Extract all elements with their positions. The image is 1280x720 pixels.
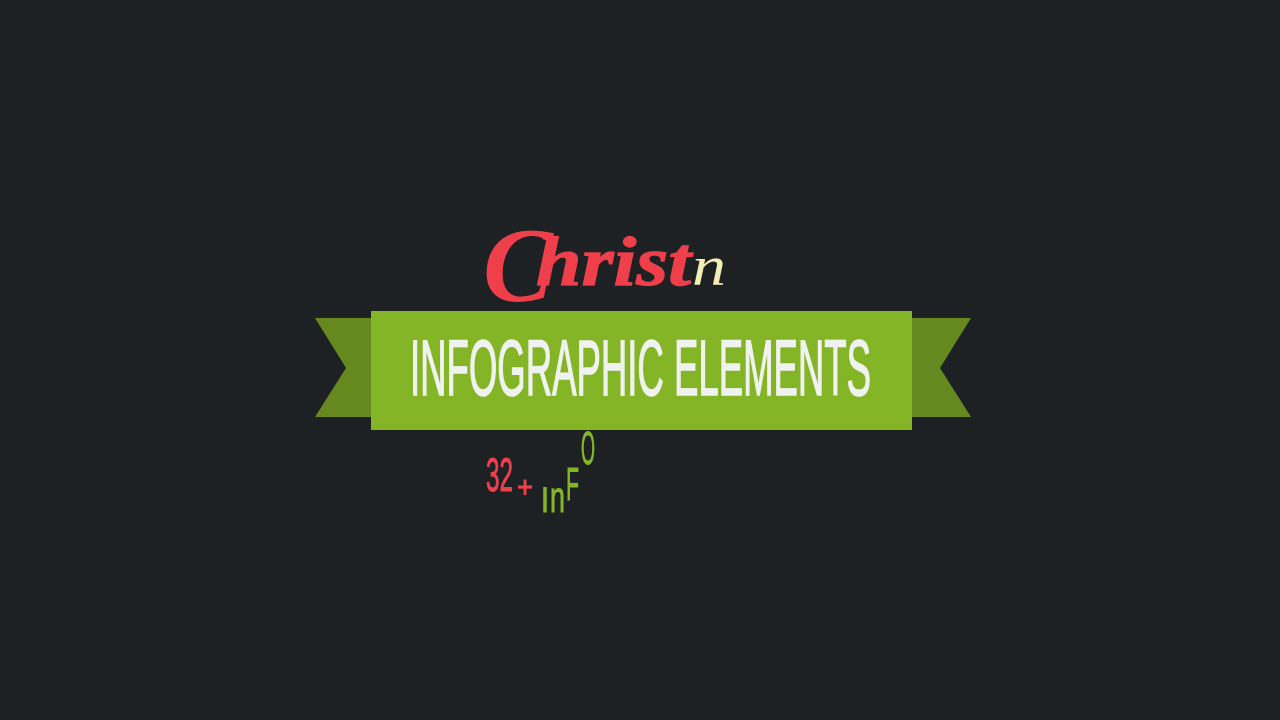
infographic title card: O [581,422,595,474]
ribbon banner [315,311,971,430]
script heading: Christm [483,207,726,324]
partially revealed letter: n [692,236,726,298]
letter: I: I [541,481,549,520]
ribbon main panel [371,311,912,430]
animated subtitle: F [566,458,579,510]
animated subtitle [486,422,595,522]
ribbon left tail [315,318,371,417]
plus sign: + [517,471,533,504]
letter: n: n [550,473,565,522]
script capital C: C [483,207,554,324]
script letters hrist: hrist [536,224,694,301]
ribbon right tail [911,318,971,417]
count: 32: 32 [486,448,513,501]
